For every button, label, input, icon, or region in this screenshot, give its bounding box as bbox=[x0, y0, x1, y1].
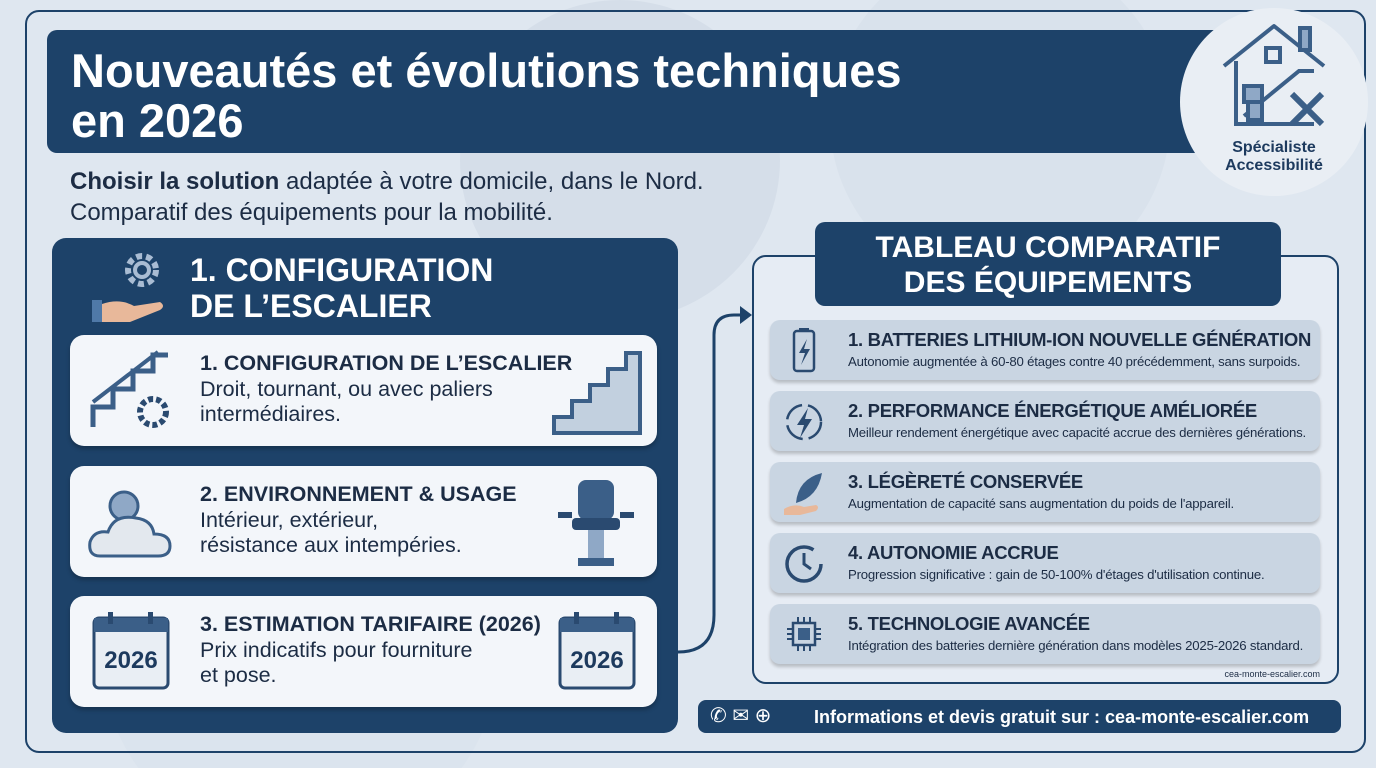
row 5: Intégration des batteries dernière génération dans modèles 2025-2026 standard. bbox=[848, 638, 1303, 653]
card 2: résistance aux intempéries. bbox=[200, 533, 462, 557]
row 4: Progression significative : gain de 50-100% d'étages d'utilisation continue. bbox=[848, 567, 1264, 582]
card 3: Prix indicatifs pour fourniture bbox=[200, 638, 472, 662]
icon: calendar 2026: 2026 bbox=[104, 647, 158, 674]
panel: tableau comparatif bbox=[752, 255, 1339, 684]
icon: staircase bbox=[552, 351, 642, 435]
title banner: Nouveautés et évolutions techniques bbox=[71, 44, 902, 97]
row 2: 2. PERFORMANCE ÉNERGÉTIQUE AMÉLIORÉE bbox=[848, 400, 1257, 421]
card 3 bbox=[70, 596, 657, 707]
card 3: 3. ESTIMATION TARIFAIRE (2026) bbox=[200, 612, 541, 636]
card 2: 2. ENVIRONNEMENT & USAGE bbox=[200, 482, 517, 506]
card 1: 1. CONFIGURATION DE L’ESCALIER bbox=[200, 351, 572, 375]
row 3: 3. LÉGÈRETÉ CONSERVÉE bbox=[848, 471, 1083, 492]
card 1 bbox=[70, 335, 657, 446]
subtitle: Choisir la solution adaptée à votre domicile, dans le Nord. bbox=[70, 168, 704, 195]
icon: feather in hand bbox=[784, 473, 822, 515]
arrow: to comparative table bbox=[678, 306, 752, 654]
icon: calendar 2026 right bbox=[558, 612, 636, 690]
row 4: 4. AUTONOMIE ACCRUE bbox=[848, 542, 1058, 563]
icons: phone mail web: ✆ ✉ ⊕ bbox=[710, 705, 771, 727]
icon: stairs with gear bbox=[90, 350, 169, 428]
row 2 bbox=[770, 391, 1320, 451]
card 2 bbox=[70, 466, 657, 577]
row 3: Augmentation de capacité sans augmentation du poids de l'appareil. bbox=[848, 496, 1234, 511]
badge: Spécialiste Accessibilité: Accessibilité bbox=[1225, 157, 1323, 174]
icon: stairlift chair bbox=[558, 480, 634, 566]
badge: Spécialiste Accessibilité bbox=[1180, 8, 1368, 196]
row 3 bbox=[770, 462, 1320, 522]
source note: cea-monte-escalier.com bbox=[1224, 669, 1320, 679]
heading: tableau comparatif: DES ÉQUIPEMENTS bbox=[904, 266, 1192, 299]
icon: sun cloud bbox=[88, 490, 172, 558]
subtitle: Comparatif des équipements pour la mobilité. bbox=[70, 199, 553, 226]
icon: energy bbox=[786, 404, 822, 440]
row 5: 5. TECHNOLOGIE AVANCÉE bbox=[848, 613, 1090, 634]
row 1: Autonomie augmentée à 60-80 étages contre 40 précédemment, sans surpoids. bbox=[848, 354, 1300, 369]
panel: configuration de l'escalier bbox=[52, 238, 678, 733]
heading: 1. CONFIGURATION bbox=[190, 252, 493, 288]
row 1 bbox=[770, 320, 1320, 380]
icon: gear and hand bbox=[92, 253, 163, 322]
card 3: et pose. bbox=[200, 663, 276, 687]
icon: clock bbox=[785, 545, 823, 583]
card 1: Droit, tournant, ou avec paliers bbox=[200, 377, 493, 401]
card 2: Intérieur, extérieur, bbox=[200, 508, 378, 532]
icon: calendar 2026 right: 2026 bbox=[570, 647, 624, 674]
row 1: 1. BATTERIES LITHIUM-ION NOUVELLE GÉNÉRATION bbox=[848, 329, 1311, 350]
footer bar: Informations et devis gratuit sur : cea-monte-escalier.com bbox=[814, 707, 1309, 727]
icon: calendar 2026 bbox=[92, 612, 170, 690]
row 4 bbox=[770, 533, 1320, 593]
icon: battery bbox=[792, 328, 816, 372]
title banner bbox=[47, 30, 1237, 153]
card 1: intermédiaires. bbox=[200, 402, 341, 426]
subtitle bbox=[70, 168, 704, 226]
footer bar bbox=[698, 700, 1341, 733]
heading: tableau comparatif bbox=[815, 222, 1281, 306]
title banner: en 2026 bbox=[71, 94, 243, 147]
heading bbox=[190, 252, 493, 324]
heading: DE L’ESCALIER bbox=[190, 288, 432, 324]
row 2: Meilleur rendement énergétique avec capacité accrue des dernières générations. bbox=[848, 425, 1306, 440]
badge: Spécialiste Accessibilité: Spécialiste bbox=[1232, 139, 1316, 156]
row 5 bbox=[770, 604, 1320, 664]
heading: tableau comparatif: TABLEAU COMPARATIF bbox=[876, 231, 1220, 264]
icon: chip bbox=[787, 617, 821, 651]
